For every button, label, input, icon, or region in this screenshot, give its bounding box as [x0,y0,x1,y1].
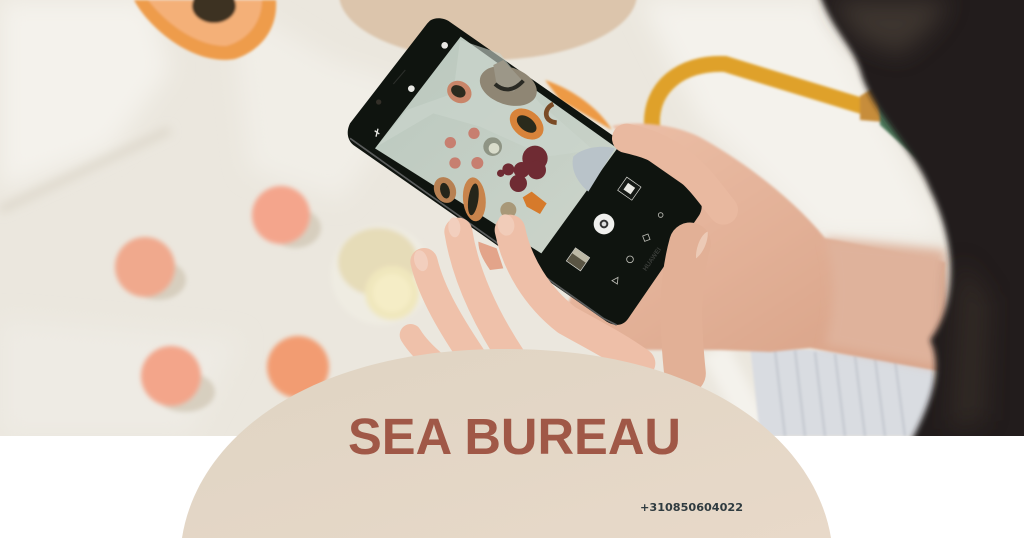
hair [812,0,1024,470]
photo striped hat [573,147,615,192]
right-hand fingers over phone edge [627,138,723,210]
phone group, drawn in 3x coordinates [348,18,723,373]
index fingernail [498,214,514,236]
phone edge highlight [350,138,617,325]
umbrella handle [652,64,924,165]
title: SEA BUREAU [348,408,681,465]
ring fingernail [412,249,430,273]
top bar icons [375,42,448,137]
gallery thumbnail [566,248,590,271]
shutter button [594,214,614,234]
middle finger [458,232,513,360]
photo grapes [497,146,548,192]
thumb of right hand [681,243,690,373]
camera preview screen [375,37,617,253]
orange fruit behind phone [545,80,612,130]
striped shirt [751,350,934,436]
photo glass [483,137,502,156]
papaya half [134,0,276,60]
forearm shading [825,238,950,370]
middle fingernail [447,217,461,238]
arch panel [182,349,831,538]
right hand and arm [560,124,945,372]
video thumbnail [618,177,641,200]
photo handle [546,104,557,123]
photo papaya right [510,108,544,140]
photo nut [500,202,516,216]
little finger [411,335,437,363]
photo papaya bottom [434,177,456,203]
phone number: +310850604022 [640,502,743,514]
navigation buttons [612,213,663,284]
fruit slices [115,186,329,412]
glass with lemon [337,227,420,321]
front camera and speaker [376,70,405,105]
photo orange [523,192,547,214]
photo papaya top [447,80,472,104]
index finger [510,230,640,363]
thumbnail [696,232,708,258]
ring finger [424,262,477,363]
hat brim [339,0,637,60]
photo hat [480,66,537,106]
photo slices [468,128,480,139]
phone body [348,18,702,325]
huawei label: HUAWEI [642,247,663,272]
palm behind fingers [478,242,503,270]
